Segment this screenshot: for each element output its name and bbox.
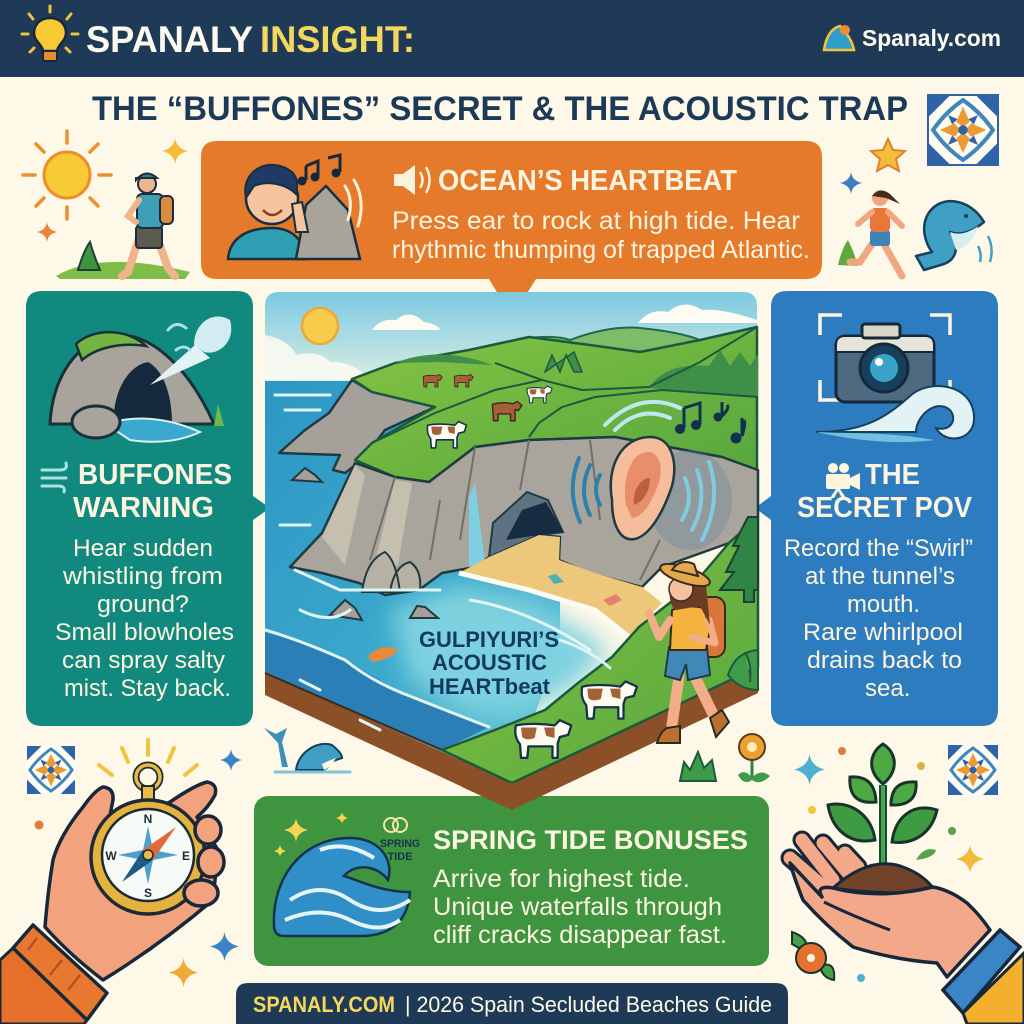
body text	[433, 865, 727, 949]
body text: Rare whirlpool	[803, 619, 963, 646]
hiker	[649, 559, 729, 743]
footer bar: | 2026 Spain Secluded Beaches Guide	[405, 992, 772, 1017]
body text: cliff cracks disappear fast.	[433, 921, 727, 949]
deep water band	[265, 630, 489, 750]
main cliff face	[290, 437, 758, 595]
body text: at the tunnel’s	[805, 563, 955, 590]
header bar	[0, 0, 1024, 77]
heading: THE	[865, 459, 920, 491]
heading	[73, 459, 232, 524]
rear cliff	[279, 380, 435, 473]
icon: swirling wave	[816, 386, 974, 442]
icon: hand holding compass	[0, 765, 224, 1024]
sound waves	[573, 402, 714, 540]
icon: small dolphin	[264, 728, 350, 772]
far hills	[470, 327, 757, 400]
body text: Hear sudden	[73, 535, 213, 562]
body text: Small blowholes	[55, 619, 234, 646]
heading: SECRET POV	[797, 492, 973, 524]
body text: sea.	[865, 675, 910, 702]
clouds and sun	[265, 304, 757, 380]
shallow water	[390, 585, 610, 715]
heading: OCEAN’S HEARTBEAT	[438, 165, 737, 197]
footer bar: SPANALY.COM	[253, 992, 395, 1017]
beach	[459, 535, 662, 637]
icon: small flower	[792, 932, 834, 980]
icon: orange sparkle	[37, 222, 57, 242]
heading: SPRING TIDE BONUSES	[433, 825, 748, 855]
map label: ACOUSTIC	[432, 650, 547, 675]
header title: INSIGHT:	[260, 19, 415, 60]
icon: cave blowhole	[50, 316, 231, 442]
body text	[55, 535, 234, 702]
body text: Unique waterfalls through	[433, 893, 722, 921]
sky	[265, 292, 757, 400]
body text: drains back to	[807, 647, 962, 674]
icon: leaping dolphin	[916, 201, 992, 270]
icon: blue sparkle	[840, 172, 862, 194]
cliff facets	[322, 440, 732, 592]
icon: spring tide badge: TIDE	[387, 851, 413, 863]
fish	[368, 647, 398, 662]
panel: secret pov	[755, 291, 998, 726]
body text: mouth.	[847, 591, 920, 618]
icon: gold sparkle	[162, 138, 188, 164]
tile: top right	[927, 94, 999, 166]
tip of earth base over panel	[462, 783, 560, 810]
panel: ocean's heartbeat	[201, 141, 822, 317]
icon: hiker top left	[56, 173, 190, 279]
icon: speaker	[394, 165, 430, 195]
icon: spring tide badge: SPRING	[380, 838, 420, 850]
map label: GULPIYURI’S	[419, 627, 559, 652]
title: THE “BUFFONES” SECRET & THE ACOUSTIC TRAP	[92, 90, 908, 128]
body text	[784, 535, 973, 702]
icon: runner	[838, 190, 902, 276]
foreground grass	[442, 517, 758, 783]
icon: grass tuft	[680, 752, 716, 781]
map label: HEARTbeat	[429, 674, 551, 699]
body text: ground?	[97, 591, 189, 618]
body text: Record the “Swirl”	[784, 535, 973, 562]
wave lines	[265, 395, 610, 730]
site logo and url: Spanaly.com	[862, 25, 1001, 51]
footer bar	[236, 983, 788, 1024]
grass ridges and trees	[355, 327, 758, 460]
heading: BUFFONES	[78, 459, 232, 491]
icon: hand holding compass: N	[144, 812, 152, 826]
tile: bottom left	[27, 746, 75, 794]
sea surface: shallow and deep water, clipped softly	[265, 585, 610, 750]
rocks	[292, 468, 438, 620]
body text: can spray salty	[62, 647, 225, 674]
body text: Arrive for highest tide.	[433, 865, 690, 893]
header title	[86, 19, 415, 60]
diorama: gulpiyuri cliffs	[265, 292, 758, 810]
icon: giant ear	[611, 437, 674, 539]
icon: person listening to rock	[228, 155, 361, 259]
icon: wind	[42, 463, 66, 492]
heading: WARNING	[73, 492, 214, 524]
panel: buffones warning	[26, 291, 270, 726]
icon: hand holding compass: E	[182, 849, 190, 863]
pine tree	[720, 517, 758, 602]
header title: SPANALY	[86, 19, 253, 60]
body text	[392, 207, 810, 264]
panel: spring tide bonuses	[254, 796, 769, 966]
icon: gold star	[871, 139, 905, 171]
icon: camera	[836, 324, 934, 402]
icon: hand holding compass: S	[144, 886, 152, 900]
music notes	[676, 402, 745, 443]
icon: sparkles and dots right	[794, 747, 984, 982]
foreground bush	[728, 650, 758, 690]
icon: wave	[274, 812, 410, 936]
icon: sun top left	[23, 131, 111, 219]
icon: hand holding compass: W	[105, 849, 117, 863]
icon: flower	[738, 734, 770, 782]
tile: bottom right	[948, 745, 998, 795]
map label	[419, 627, 559, 699]
icon: spring tide badge	[380, 818, 420, 863]
body text: mist. Stay back.	[64, 675, 231, 702]
cave mouth	[489, 492, 563, 557]
icon: viewfinder brackets	[820, 315, 950, 400]
icon: rays and sparkles	[34, 740, 242, 987]
icon: movie camera	[826, 463, 860, 498]
icon: hand holding seedling	[790, 744, 1024, 1024]
waterfall	[469, 483, 485, 567]
body text: whistling from	[62, 563, 223, 590]
heading	[797, 459, 973, 524]
icon: light bulb	[22, 6, 78, 61]
cows	[423, 374, 637, 758]
earth base	[265, 667, 758, 810]
body text: Press ear to rock at high tide. Hear	[392, 207, 800, 235]
sea	[265, 381, 560, 783]
body text: rhythmic thumping of trapped Atlantic.	[392, 236, 810, 264]
plateau grass	[352, 327, 757, 482]
